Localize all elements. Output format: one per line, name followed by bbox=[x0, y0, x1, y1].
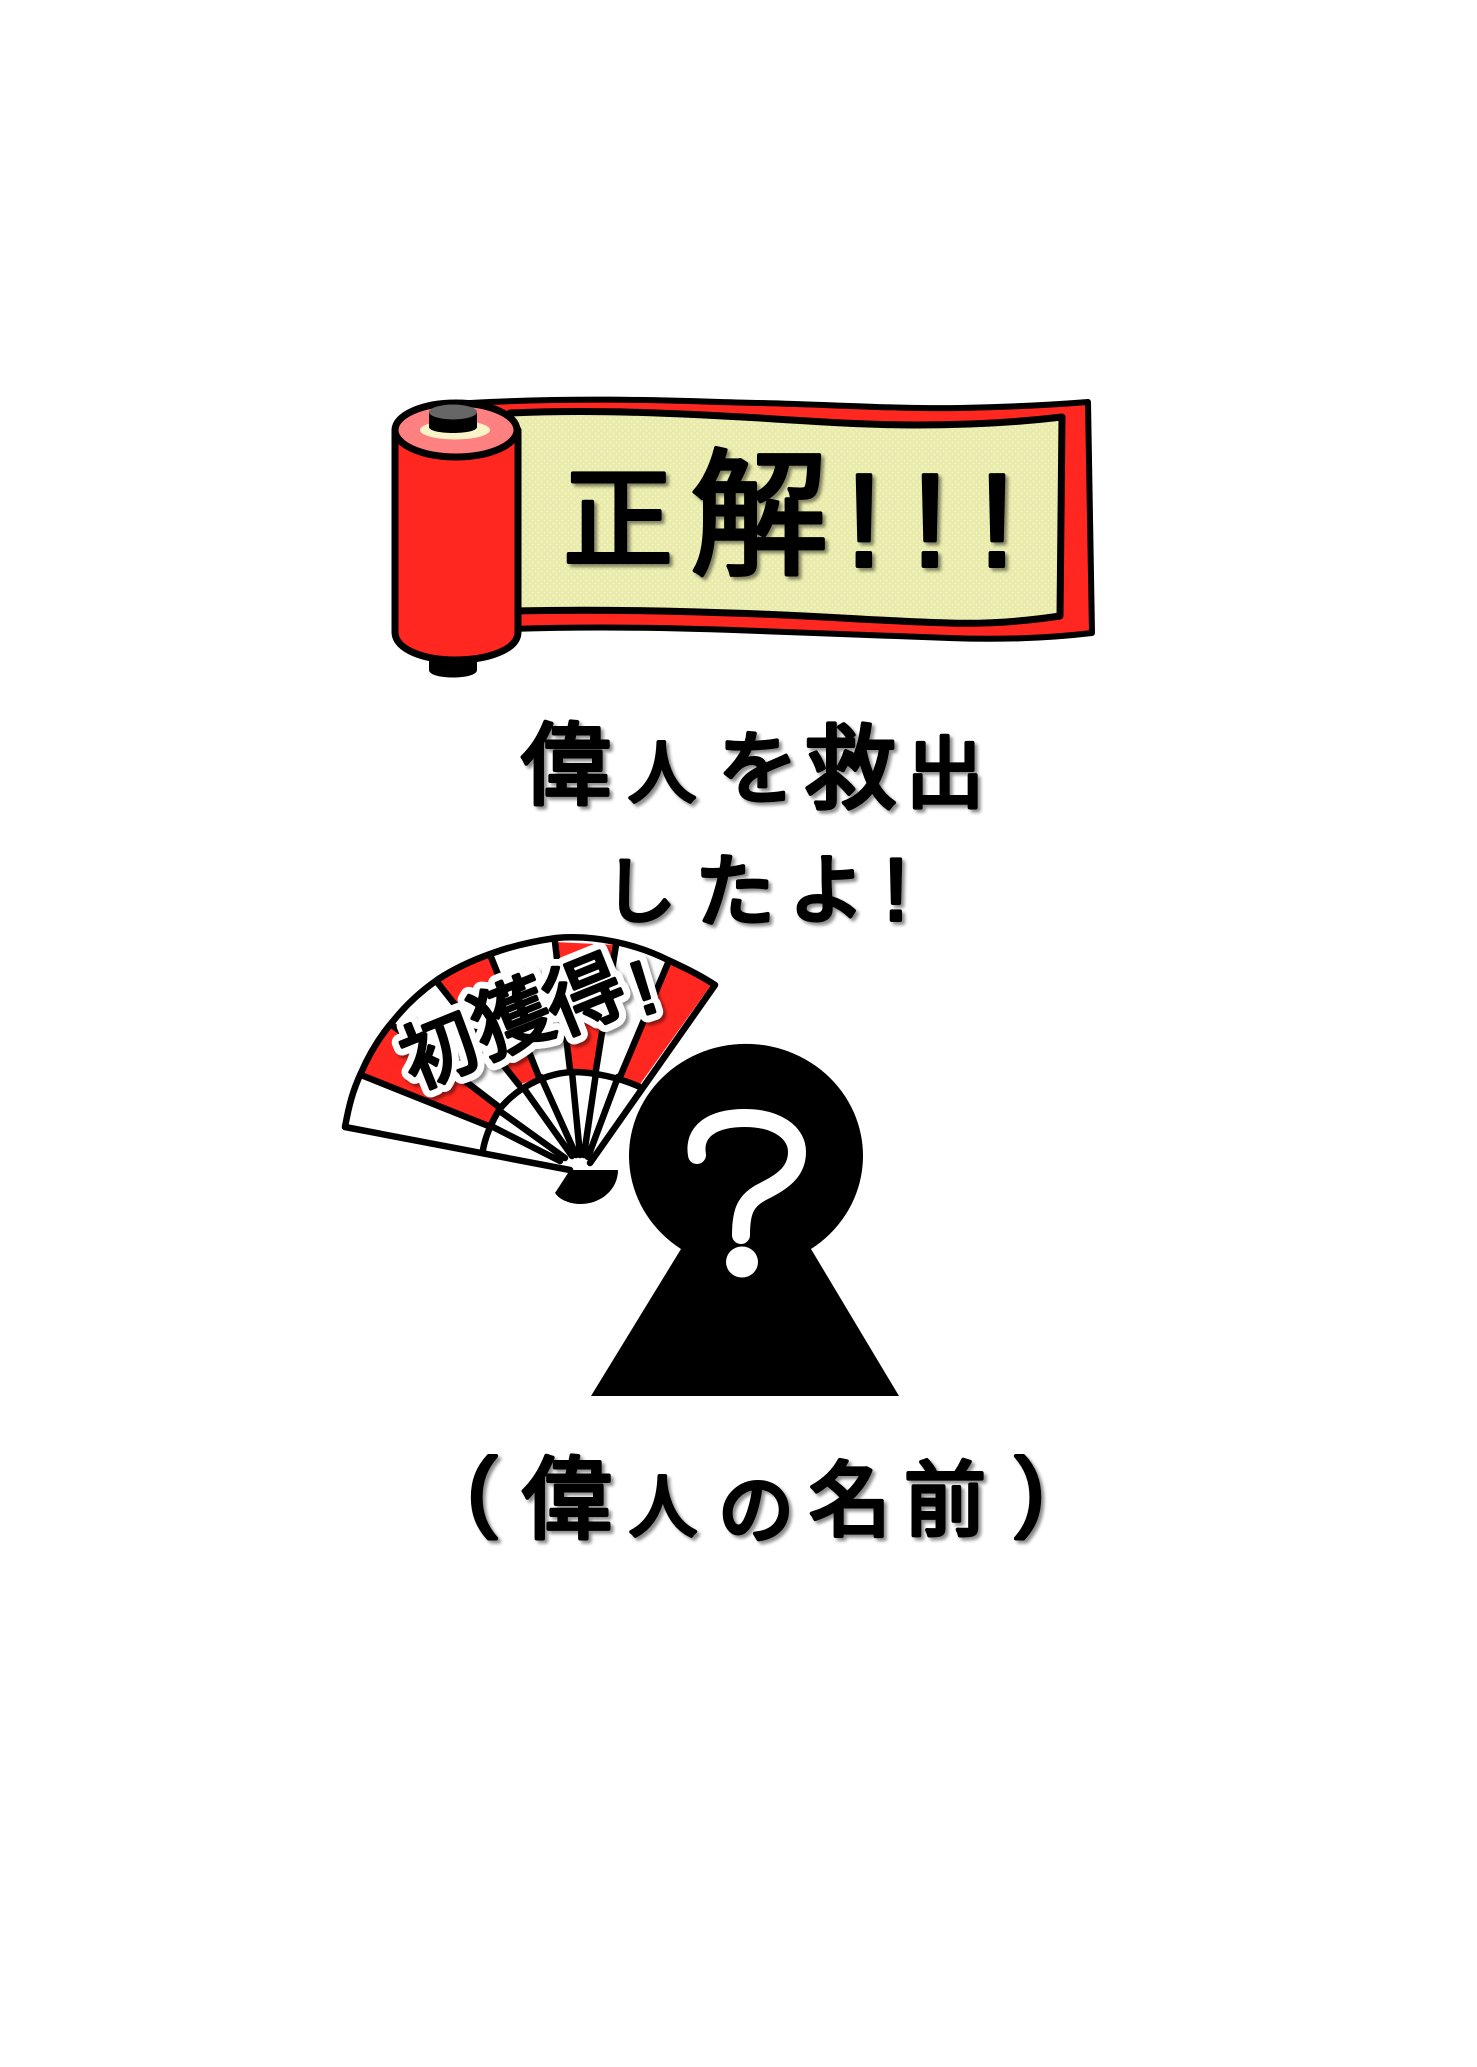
fan caption bbox=[390, 940, 667, 1104]
fan caption: 得 bbox=[532, 940, 637, 1051]
mystery person silhouette bbox=[591, 1044, 899, 1396]
fan red panels bbox=[361, 942, 711, 1127]
message line 1: 救 bbox=[804, 719, 896, 821]
folding fan bbox=[345, 937, 715, 1204]
message line 1: を bbox=[718, 725, 798, 814]
banner scroll bbox=[395, 400, 1092, 678]
message line 1: 人 bbox=[628, 736, 696, 812]
banner heading: ! bbox=[912, 447, 948, 594]
fan caption: ! bbox=[620, 945, 667, 1032]
silhouette shape bbox=[591, 1044, 899, 1396]
person name placeholder: ) bbox=[1015, 1440, 1045, 1539]
fan handle bbox=[555, 1170, 618, 1204]
question mark bbox=[696, 1118, 797, 1235]
scroll sheet red border bbox=[470, 400, 1092, 639]
fan caption: 初 bbox=[390, 999, 489, 1104]
roller body bbox=[395, 430, 518, 660]
banner heading: ! bbox=[846, 447, 882, 594]
person name placeholder: 人 bbox=[629, 1470, 697, 1546]
banner heading: 解 bbox=[690, 440, 828, 594]
person name placeholder: 偉 bbox=[522, 1451, 612, 1551]
banner heading: 正 bbox=[563, 459, 673, 582]
fan caption: ! bbox=[620, 945, 667, 1032]
fan body outline bbox=[345, 937, 715, 1150]
roller top knob bbox=[429, 404, 477, 433]
message line 2: ! bbox=[884, 840, 908, 939]
roller bottom knob bbox=[429, 650, 477, 678]
fan caption: 初 bbox=[390, 999, 489, 1104]
message line 1: 出 bbox=[906, 730, 984, 818]
roller inner ring bbox=[420, 420, 490, 440]
message line 1: 偉 bbox=[521, 717, 611, 817]
scroll paper panel bbox=[510, 412, 1062, 623]
fan ribs and frame bbox=[345, 937, 715, 1170]
banner heading: ! bbox=[979, 447, 1015, 594]
fan caption: 獲 bbox=[459, 963, 564, 1074]
person name placeholder: 前 bbox=[904, 1456, 986, 1547]
person name placeholder: 名 bbox=[809, 1456, 891, 1547]
message line 2: し bbox=[604, 853, 676, 933]
question mark dot bbox=[726, 1246, 758, 1278]
fan caption: 獲 bbox=[459, 963, 564, 1074]
fan caption: 得 bbox=[532, 940, 637, 1051]
message line 2: よ bbox=[789, 849, 865, 934]
message line 2: た bbox=[695, 848, 775, 937]
roller top cap bbox=[395, 403, 517, 457]
person name placeholder: の bbox=[718, 1469, 794, 1554]
person name placeholder: ( bbox=[467, 1440, 497, 1539]
